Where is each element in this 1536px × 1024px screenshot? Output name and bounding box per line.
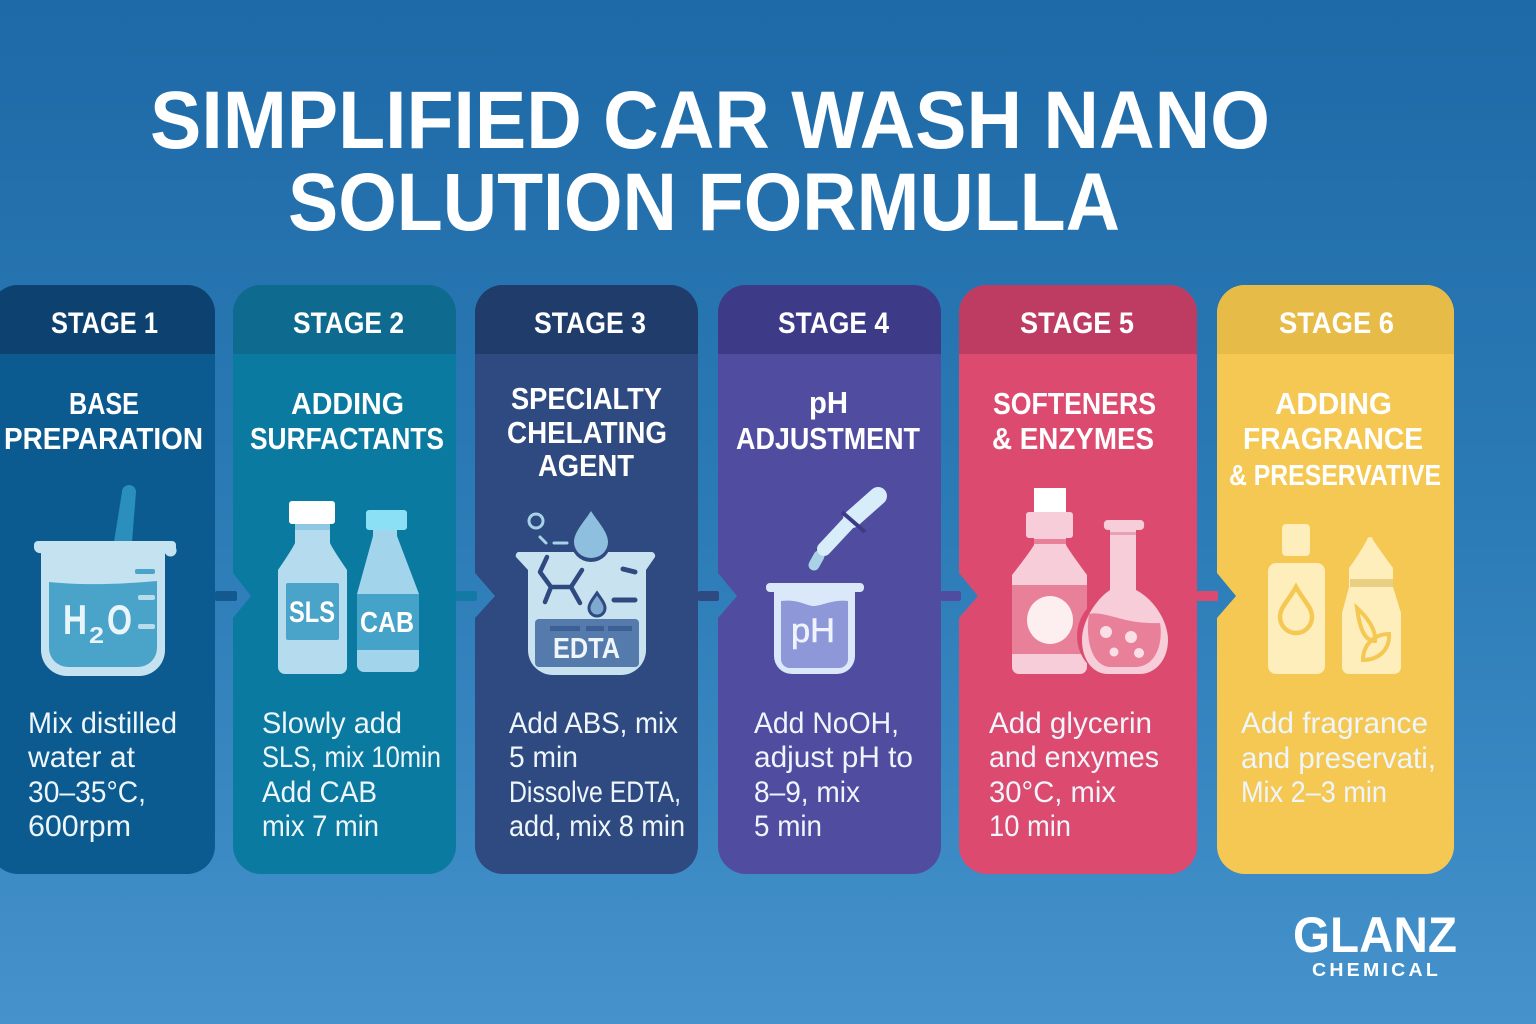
heading: softeners and enzymes: & ENZYMES — [992, 421, 1154, 456]
panel: stage 5 — [959, 285, 1197, 874]
icon: SLS and CAB bottles — [278, 501, 419, 674]
panel: stage 3: STAGE 3 — [534, 307, 646, 340]
text: stage 2 steps: Slowly add — [262, 707, 402, 740]
icon: beaker of water: O — [107, 596, 132, 643]
text: stage 2 steps — [262, 707, 441, 843]
panel: stage 6: STAGE 6 — [1279, 307, 1394, 340]
text: stage 3 steps: Dissolve EDTA, — [509, 776, 681, 809]
text: stage 5 steps: 10 min — [989, 810, 1071, 843]
heading: adding fragrance and preservative: ADDING — [1275, 386, 1392, 421]
text: stage 3 steps: Add ABS, mix — [509, 707, 678, 740]
text: stage 1 steps — [27, 707, 177, 843]
arrow: stage 3 to 4 — [698, 573, 737, 618]
panel: stage 3 — [475, 285, 698, 874]
heading: pH adjustment: ADJUSTMENT — [736, 421, 920, 456]
heading: base preparation: BASE — [69, 386, 139, 421]
text: stage 4 steps — [754, 707, 913, 843]
text: stage 6 steps: and preservati, — [1241, 742, 1436, 775]
title: SOLUTION FORMULLA — [288, 157, 1120, 248]
heading: specialty chelating agent: SPECIALTY — [511, 381, 662, 416]
icon: SLS and CAB bottles: SLS — [289, 596, 335, 629]
text: stage 1 steps: 600rpm — [28, 810, 131, 843]
heading: adding fragrance and preservative: & PRESERVATIVE — [1229, 460, 1441, 492]
heading: adding surfactants — [250, 386, 444, 456]
arrow: stage 2 to 3 — [456, 573, 495, 618]
panel: stage 1: STAGE 1 — [51, 307, 158, 340]
text: stage 2 steps: Add CAB — [262, 776, 377, 809]
text: stage 6 steps: Mix 2–3 min — [1241, 776, 1387, 809]
icon: EDTA beaker: EDTA — [553, 633, 620, 665]
text: stage 4 steps: 5 min — [754, 810, 822, 843]
arrow: stage 1 to 2 — [215, 573, 251, 618]
arrow: stage 4 to 5 — [941, 573, 978, 618]
text: stage 6 steps: Add fragrance — [1241, 707, 1428, 740]
arrow: stage 5 to 6 — [1197, 573, 1236, 618]
text: stage 3 steps: 5 min — [509, 741, 578, 774]
text: stage 4 steps: Add NoOH, — [754, 707, 899, 740]
text: stage 2 steps: SLS, mix 10min — [262, 741, 441, 774]
panel: stage 1 — [0, 285, 215, 874]
panel: stage 5: STAGE 5 — [1020, 307, 1134, 340]
heading: base preparation: PREPARATION — [4, 421, 203, 456]
heading: base preparation — [4, 386, 203, 456]
panel: stage 2 — [233, 285, 456, 874]
panel: stage 4 — [718, 285, 941, 874]
heading: adding surfactants: ADDING — [291, 386, 404, 421]
heading: softeners and enzymes — [992, 386, 1156, 456]
icon: dropper and pH beaker: pH — [791, 612, 835, 650]
heading: adding fragrance and preservative: FRAGRANCE — [1243, 421, 1423, 456]
heading: adding fragrance and preservative — [1229, 386, 1441, 492]
text: stage 5 steps — [989, 707, 1159, 843]
text: stage 6 steps — [1241, 707, 1436, 809]
icon: softener bottle and enzyme flask — [1012, 488, 1169, 680]
text: stage 1 steps: water at — [27, 741, 136, 774]
panel: stage 4: STAGE 4 — [778, 307, 889, 340]
text: stage 1 steps: Mix distilled — [28, 707, 177, 740]
title: SIMPLIFIED CAR WASH NANO — [150, 75, 1270, 166]
heading: specialty chelating agent — [507, 381, 667, 483]
text: stage 3 steps: add, mix 8 min — [509, 810, 685, 843]
text: stage 4 steps: adjust pH to — [754, 741, 913, 774]
text: stage 4 steps: 8–9, mix — [754, 776, 860, 809]
heading: pH adjustment: pH — [809, 385, 848, 420]
title — [150, 75, 1270, 248]
heading: adding surfactants: SURFACTANTS — [250, 421, 444, 456]
heading: specialty chelating agent: AGENT — [538, 448, 634, 483]
icon: SLS and CAB bottles: CAB — [360, 607, 414, 639]
text: stage 3 steps — [509, 707, 685, 843]
heading: pH adjustment — [736, 385, 920, 456]
text: stage 1 steps: 30–35°C, — [28, 776, 146, 809]
icon: beaker of water — [34, 485, 177, 676]
logo: Glanz Chemical: CHEMICAL — [1312, 960, 1441, 980]
panel: stage 6 — [1217, 285, 1454, 874]
text: stage 5 steps: Add glycerin — [989, 707, 1152, 740]
heading: specialty chelating agent: CHELATING — [507, 415, 667, 450]
icon: EDTA beaker — [516, 511, 655, 675]
icon: beaker of water: H — [63, 596, 87, 643]
text: stage 2 steps: mix 7 min — [262, 810, 379, 843]
icon: beaker of water: 2 — [89, 622, 104, 648]
icon: dropper and pH beaker — [766, 496, 878, 674]
heading: softeners and enzymes: SOFTENERS — [993, 386, 1156, 421]
panel: stage 2: STAGE 2 — [293, 307, 404, 340]
text: stage 5 steps: and enxymes — [989, 741, 1159, 774]
logo: Glanz Chemical: GLANZ — [1293, 907, 1457, 963]
text: stage 5 steps: 30°C, mix — [989, 776, 1116, 809]
icon: fragrance and preservative bottles — [1268, 524, 1401, 674]
